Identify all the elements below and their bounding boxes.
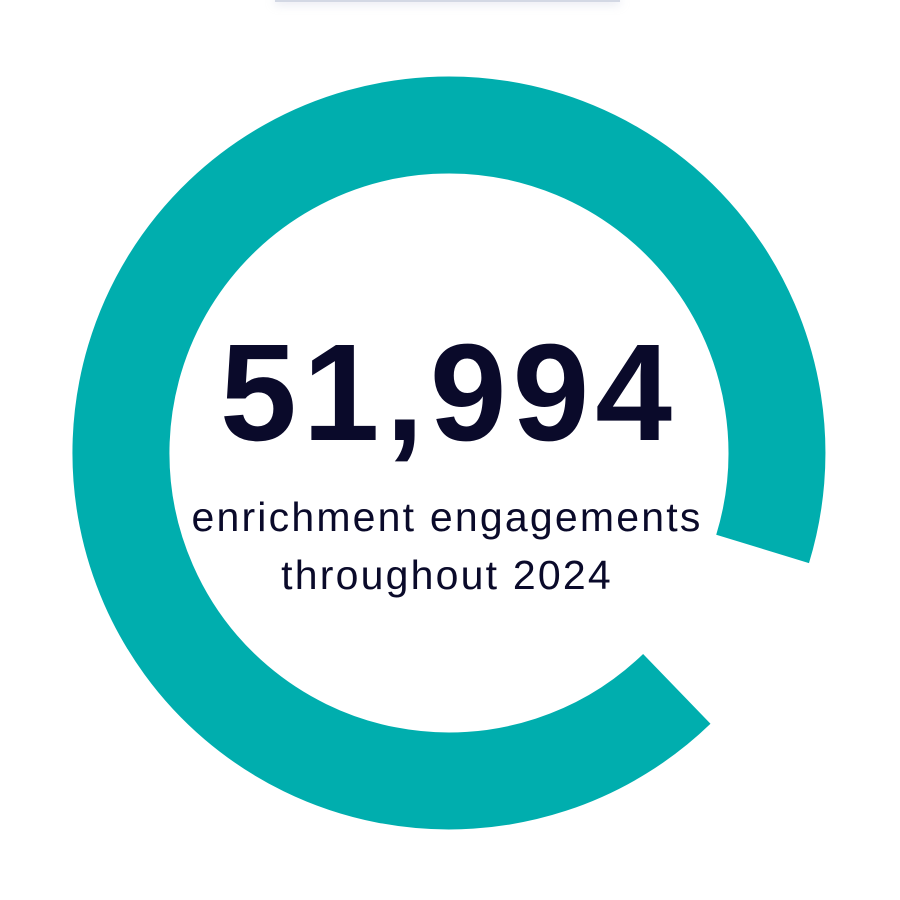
top bar	[275, 0, 620, 2]
caption: throughout 2024	[281, 552, 613, 598]
big number: 51,994	[220, 316, 678, 470]
caption: enrichment engagements	[191, 494, 703, 540]
caption	[191, 494, 703, 598]
